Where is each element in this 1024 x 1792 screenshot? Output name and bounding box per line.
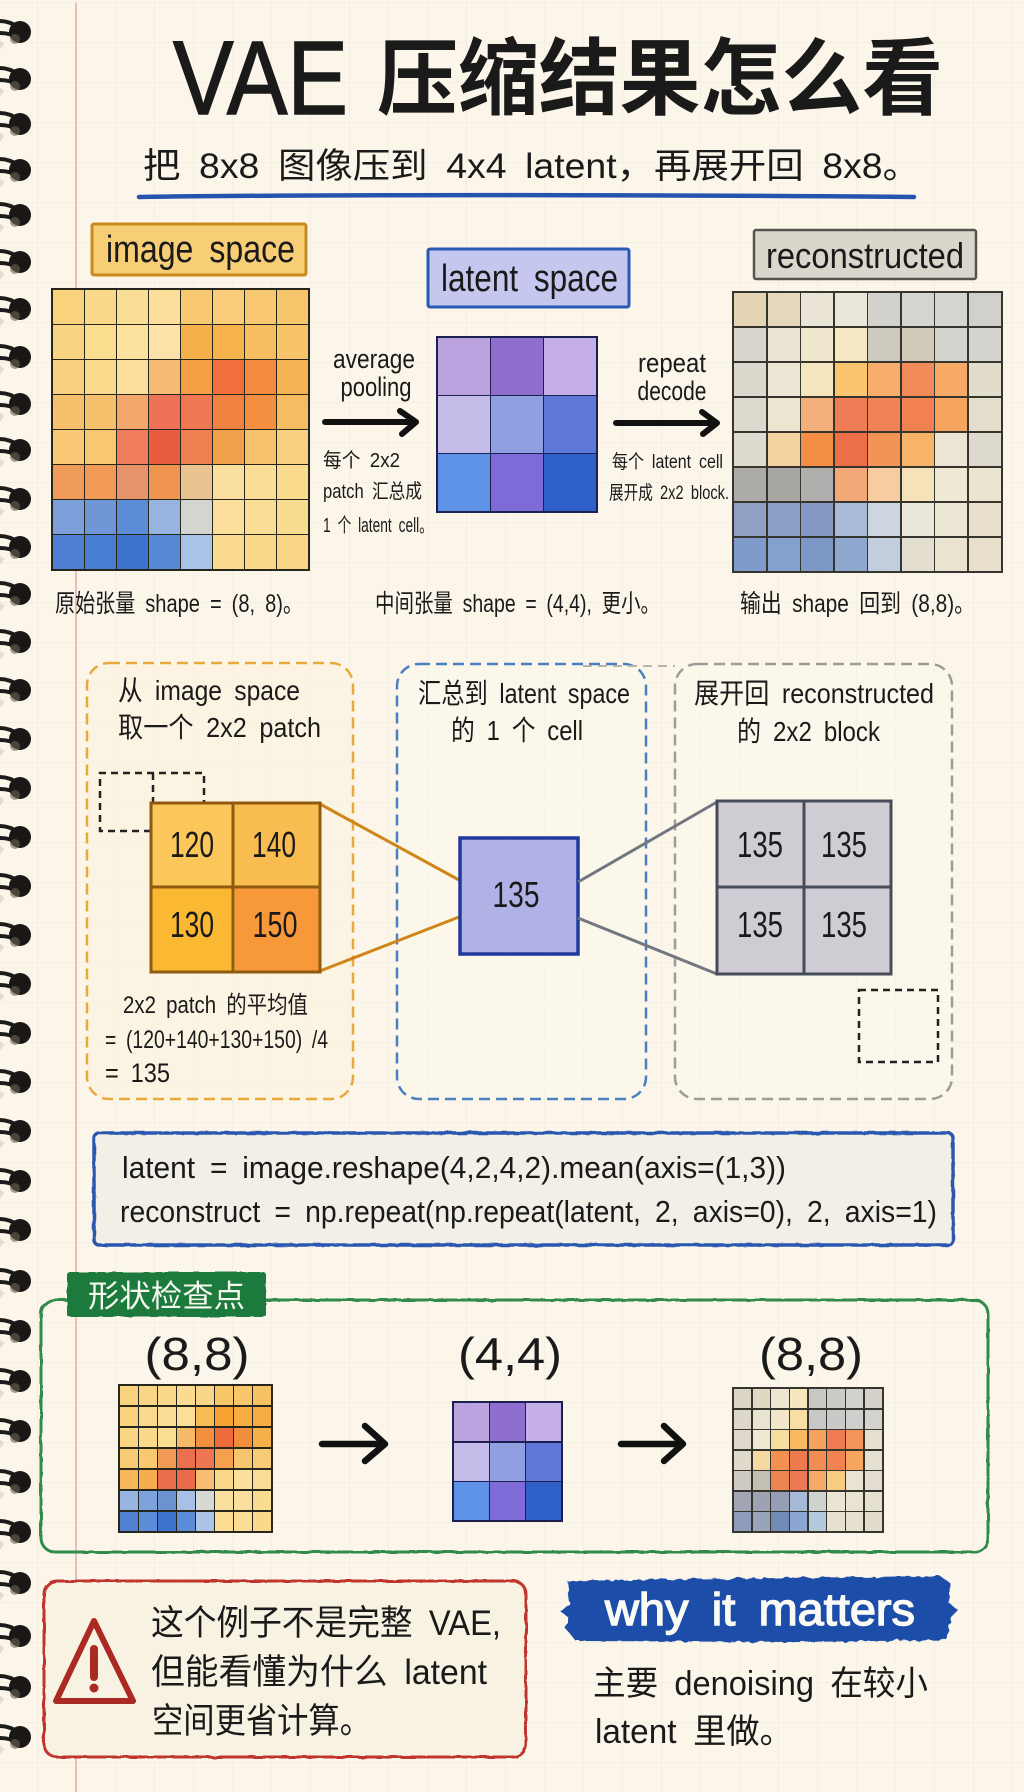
caption: output shape: 输出 shape 回到 (8,8)。 xyxy=(740,590,975,618)
why it matters banner: why it matters xyxy=(604,1584,915,1635)
2x2 patch: 140 xyxy=(252,824,296,865)
arrow label: repeat decode: decode xyxy=(638,376,706,406)
warning box: 空间更省计算。 xyxy=(152,1702,371,1741)
note: decode xyxy=(609,451,729,504)
2x2 reconstructed block: 135 xyxy=(821,904,867,945)
warning box xyxy=(44,1581,526,1757)
title xyxy=(173,20,943,137)
2x2 reconstructed block: 135 xyxy=(737,904,783,945)
panel: latent cell: 汇总到 latent space xyxy=(418,678,630,709)
code box: latent = image.reshape(4,2,4,2).mean(axis=(1,3)) xyxy=(122,1150,786,1185)
note: pooling: 1 个 latent cell。 xyxy=(323,514,433,537)
arrow: latent to reconstructed xyxy=(616,412,717,434)
spiral binding xyxy=(0,21,31,1755)
panel: image patch: 2x2 patch 的平均值 xyxy=(123,992,308,1019)
arrow label: average pooling: average xyxy=(333,344,415,374)
panel: reconstructed block xyxy=(583,664,952,1099)
subtitle underline xyxy=(139,195,914,197)
mini reconstructed grid xyxy=(732,1387,884,1533)
latent cell xyxy=(460,838,578,954)
panel: reconstructed block: 的 2x2 block xyxy=(737,716,881,747)
title: VAE xyxy=(173,20,348,137)
note: pooling: 每个 2x2 xyxy=(323,449,400,472)
shape label: 8,8 input: (8,8) xyxy=(144,1328,250,1380)
panel: image patch: 从 image space xyxy=(118,675,300,706)
note: decode: 展开成 2x2 block. xyxy=(609,482,729,504)
label: latent space: latent space xyxy=(441,258,618,300)
2x2 patch: 150 xyxy=(252,904,298,945)
mini latent grid xyxy=(452,1401,563,1522)
arrow label: average pooling: pooling xyxy=(340,372,412,402)
why it matters text: 主要 denoising 在较小 xyxy=(593,1665,928,1703)
title: 压缩结果怎么看 xyxy=(377,32,943,126)
arrow label: repeat decode xyxy=(638,348,706,406)
shape label: 8,8 output: (8,8) xyxy=(759,1328,863,1380)
panel: reconstructed block: 展开回 reconstructed xyxy=(694,678,934,709)
latent space grid xyxy=(436,336,598,513)
caption: latent shape: 中间张量 shape = (4,4), 更小。 xyxy=(375,590,660,618)
warning box: 这个例子不是完整 VAE, xyxy=(151,1604,501,1643)
2x2 reconstructed block: 135 xyxy=(821,824,867,865)
image space grid xyxy=(51,288,310,571)
icon: warning triangle xyxy=(56,1621,133,1701)
panel: latent cell xyxy=(397,664,646,1099)
mini image grid xyxy=(118,1384,273,1533)
caption: image shape: 原始张量 shape = (8, 8)。 xyxy=(55,590,303,618)
arrow: image to latent xyxy=(325,411,416,434)
note: pooling xyxy=(323,449,433,537)
arrow label: average pooling xyxy=(333,344,415,402)
panel: shape checkpoints xyxy=(41,1300,988,1552)
subtitle: 把 8x8 图像压到 4x4 latent，再展开回 8x8。 xyxy=(143,147,920,186)
arrow label: repeat decode: repeat xyxy=(638,348,706,378)
code box: reconstruct = np.repeat(np.repeat(latent, 2, axis=0), 2, axis=1) xyxy=(120,1194,937,1229)
connector: cell to block xyxy=(578,802,717,974)
2x2 reconstructed block xyxy=(717,801,891,974)
label: shape checkpoints xyxy=(68,1273,265,1316)
2x2 reconstructed block: 135 xyxy=(737,824,783,865)
code box xyxy=(94,1133,953,1245)
arrow: to latent xyxy=(322,1426,385,1461)
label: image space: image space xyxy=(106,229,295,271)
arrow: to reconstructed xyxy=(621,1426,683,1461)
panel: latent cell: 的 1 个 cell xyxy=(451,715,583,746)
latent cell: 135 xyxy=(492,874,540,915)
reconstructed grid xyxy=(732,291,1003,573)
why it matters banner xyxy=(560,1576,958,1642)
panel: image patch: 取一个 2x2 patch xyxy=(118,712,321,743)
2x2 patch: 120 xyxy=(170,824,214,865)
label: reconstructed: reconstructed xyxy=(766,235,964,276)
2x2 patch xyxy=(151,803,320,972)
why it matters text: latent 里做。 xyxy=(595,1713,793,1751)
note: pooling: patch 汇总成 xyxy=(323,480,422,503)
warning box: 但能看懂为什么 latent xyxy=(151,1653,487,1692)
panel: image patch: = 135 xyxy=(105,1058,170,1088)
why it matters text xyxy=(593,1665,928,1751)
dashed target block xyxy=(859,990,938,1062)
label: shape checkpoints: 形状检查点 xyxy=(88,1279,245,1314)
label: latent space xyxy=(428,249,629,307)
2x2 patch: 130 xyxy=(170,904,214,945)
panel: image patch xyxy=(87,663,353,1099)
shape label: 4,4: (4,4) xyxy=(458,1328,562,1380)
dashed source patches xyxy=(100,773,204,831)
note: decode: 每个 latent cell xyxy=(612,451,723,473)
panel: image patch: = (120+140+130+150) /4 xyxy=(105,1026,328,1054)
connector: patch to cell xyxy=(320,804,459,971)
